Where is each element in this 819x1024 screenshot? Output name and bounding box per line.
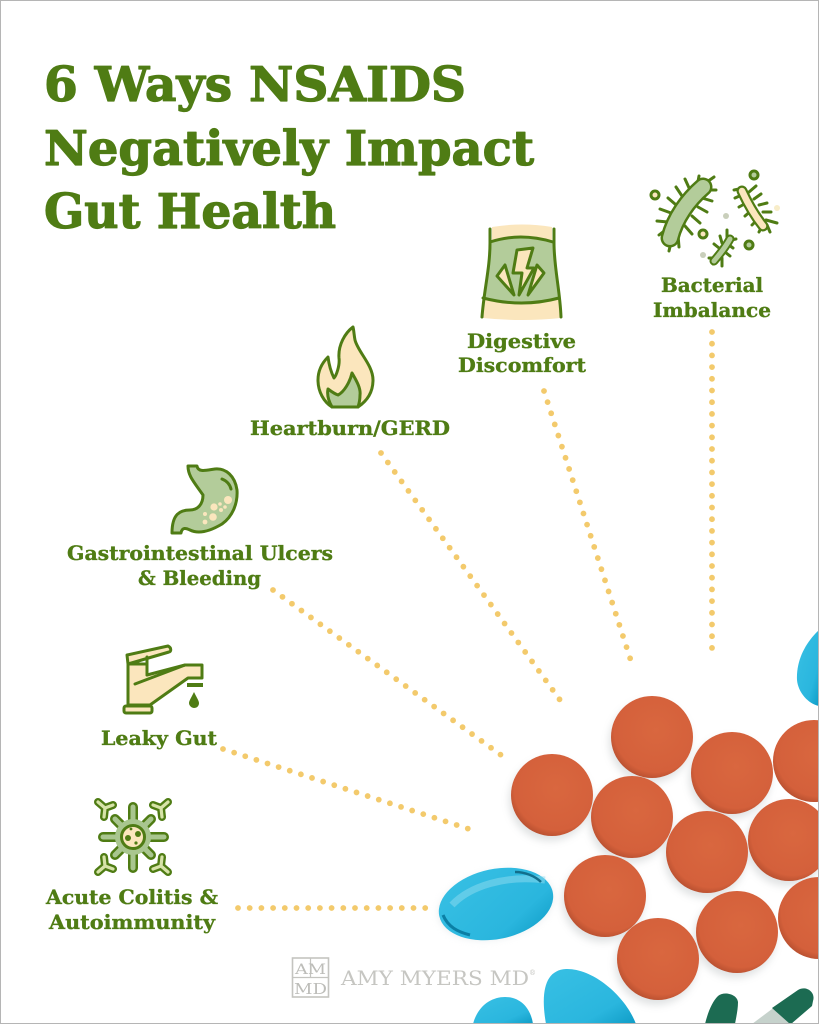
- icon: bacteria: [651, 171, 780, 266]
- label: acute colitis and autoimmunity: Acute Colitis &: [45, 885, 218, 909]
- logo: Amy Myers MD: AM: [294, 962, 326, 978]
- label: heartburn/GERD: Heartburn/GERD: [250, 416, 450, 440]
- label: acute colitis and autoimmunity: [45, 885, 218, 934]
- label: leaky gut: Leaky Gut: [101, 726, 218, 750]
- label: gastrointestinal ulcers and bleeding: & Bleeding: [138, 566, 261, 590]
- label: acute colitis and autoimmunity: Autoimmunity: [48, 910, 216, 934]
- logo: Amy Myers MD: [292, 958, 536, 998]
- icon: flame: [318, 327, 373, 407]
- label: gastrointestinal ulcers and bleeding: Gastrointestinal Ulcers: [67, 541, 333, 565]
- logo: Amy Myers MD: AMY MYERS MD: [340, 966, 529, 990]
- icon: leaky faucet: [124, 646, 203, 713]
- label: bacterial imbalance: [653, 273, 771, 322]
- label: bacterial imbalance: Imbalance: [653, 298, 771, 322]
- label: digestive discomfort: Discomfort: [458, 353, 587, 377]
- dotted connector lines: [223, 332, 712, 908]
- icon: abdomen with lightning: [482, 224, 561, 320]
- label: bacterial imbalance: Bacterial: [661, 273, 763, 297]
- label: gastrointestinal ulcers and bleeding: [67, 541, 333, 590]
- title: [44, 57, 534, 240]
- photo: green capsules: [705, 988, 814, 1024]
- logo: Amy Myers MD: MD: [294, 980, 327, 998]
- label: digestive discomfort: [458, 329, 587, 377]
- icon: virus: [98, 802, 168, 872]
- label: digestive discomfort: Digestive: [467, 329, 576, 353]
- icon: stomach: [172, 466, 237, 533]
- photo: orange tablets: [509, 696, 819, 1005]
- title: Gut Health: [44, 184, 336, 240]
- photo: blue capsules: [432, 630, 819, 1024]
- title: Negatively Impact: [44, 121, 534, 177]
- logo: Amy Myers MD: ®: [529, 969, 536, 977]
- title: 6 Ways NSAIDS: [44, 57, 466, 113]
